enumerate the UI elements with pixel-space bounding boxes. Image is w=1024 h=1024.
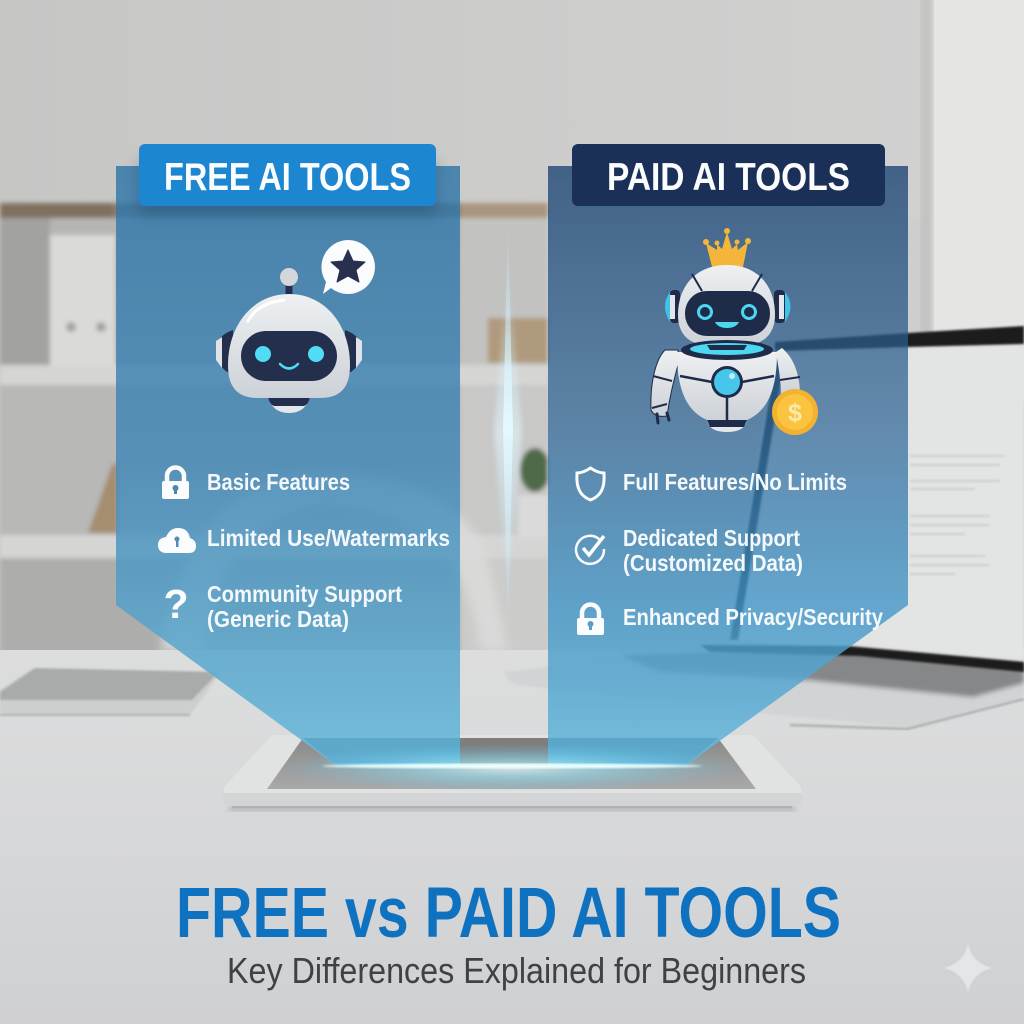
- paid heading badge: PAID AI TOOLS: [607, 156, 850, 199]
- list: free tools features: [158, 468, 450, 632]
- laptop: [505, 326, 1024, 729]
- head: [228, 294, 350, 398]
- Limited Use/Watermarks: Limited Use/Watermarks: [207, 525, 450, 551]
- Full Features/No Limits: Full Features/No Limits: [623, 469, 847, 495]
- panel: free tools: [116, 166, 460, 766]
- projection base band: [303, 738, 718, 766]
- tablet screen: [267, 738, 756, 789]
- icon: check circle: [576, 536, 604, 564]
- Dedicated Support (Customized Data): (Customized Data): [623, 550, 803, 576]
- list: paid tools features: [576, 468, 883, 635]
- Community Support (Generic Data): Community Support: [207, 581, 402, 607]
- head: [678, 265, 775, 345]
- free heading badge: [139, 144, 436, 214]
- light beam divider: [494, 215, 522, 635]
- icon: shield: [577, 468, 604, 500]
- icon: sparkle watermark: [944, 944, 992, 992]
- icon: free robot with star bubble: [216, 240, 375, 413]
- shelving unit: [0, 203, 928, 658]
- Community Support (Generic Data): [207, 581, 402, 632]
- ears: [216, 330, 233, 375]
- collar: [681, 340, 773, 360]
- Basic Features: Basic Features: [207, 469, 350, 495]
- Community Support (Generic Data): (Generic Data): [207, 606, 349, 632]
- chair back: [160, 474, 508, 652]
- base: [268, 396, 310, 413]
- subtitle: Key Differences Explained for Beginners: [227, 950, 806, 991]
- arms: [651, 350, 678, 416]
- body: [677, 352, 777, 420]
- desk: [0, 650, 1024, 1024]
- icon: paid robot with crown and coin: [651, 228, 818, 435]
- title: FREE vs PAID AI TOOLS: [176, 874, 841, 953]
- visor: [685, 291, 770, 336]
- crown: [706, 232, 748, 267]
- paid heading badge: [572, 144, 885, 206]
- star: [331, 250, 365, 282]
- icon: cloud: [158, 528, 196, 553]
- coin: [772, 389, 818, 435]
- free heading badge: FREE AI TOOLS: [164, 156, 411, 199]
- chest core: [711, 366, 743, 398]
- small tablet on desk: [0, 668, 221, 715]
- icon: paid robot with crown and coin: $: [788, 399, 802, 427]
- visor: [241, 331, 337, 381]
- antenna: [286, 284, 292, 296]
- panel: paid tools: [548, 166, 908, 766]
- projector glow: [277, 744, 747, 792]
- icon: lock: [577, 604, 604, 635]
- icon: lock: [162, 468, 189, 499]
- Dedicated Support (Customized Data): Dedicated Support: [623, 525, 800, 551]
- speech bubble: [321, 240, 375, 294]
- central tablet projector: [223, 735, 802, 811]
- Enhanced Privacy/Security: Enhanced Privacy/Security: [623, 604, 883, 630]
- ears: [665, 292, 670, 322]
- wall column: [930, 0, 1024, 400]
- icon: question mark: ?: [163, 581, 189, 627]
- Dedicated Support (Customized Data): [623, 525, 803, 576]
